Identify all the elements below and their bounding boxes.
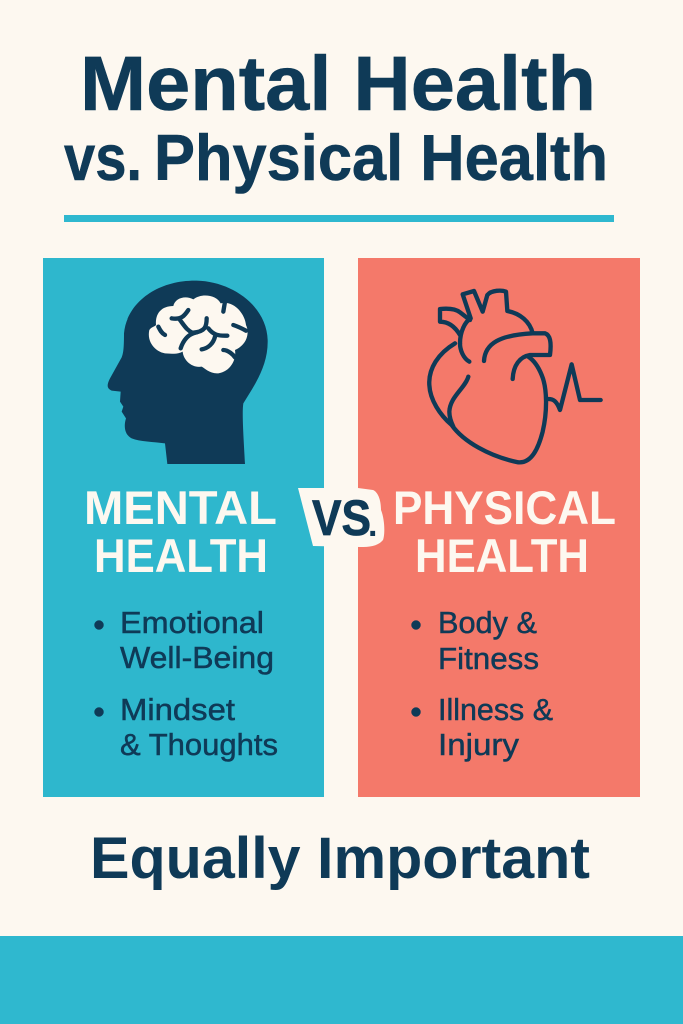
heading: mental health [84, 481, 277, 582]
heading: physical health: HEALTH [415, 529, 589, 582]
heading: mental health: HEALTH [94, 529, 268, 582]
list: mental health [94, 605, 278, 762]
list: mental health: & Thoughts [120, 727, 278, 762]
title: vs. [64, 121, 142, 194]
list: physical health: Illness & [438, 692, 553, 727]
list: mental health: Mindset [120, 692, 235, 727]
list: physical health: Fitness [438, 641, 539, 676]
list: physical health: Body & [438, 605, 537, 640]
heading: physical health: PHYSICAL [393, 481, 616, 534]
list: physical health: Injury [438, 727, 520, 762]
footer band [0, 936, 683, 1024]
list: mental health: Emotional [120, 605, 264, 640]
list: physical health [412, 605, 553, 762]
title [64, 41, 608, 194]
icon: head with brain [108, 281, 268, 464]
list: mental health: Well-Being [120, 640, 274, 675]
heading: physical health [393, 481, 616, 582]
badge: vs: . [368, 506, 377, 544]
panel: mental health [43, 258, 324, 797]
title: Physical Health [154, 121, 608, 194]
heading: mental health: MENTAL [84, 481, 277, 534]
title: Mental Health [80, 41, 596, 127]
icon: heart with pulse [429, 291, 601, 462]
badge: vs: VS [312, 490, 371, 546]
closing statement: Equally Important [90, 826, 590, 891]
panel: physical health [358, 258, 640, 797]
